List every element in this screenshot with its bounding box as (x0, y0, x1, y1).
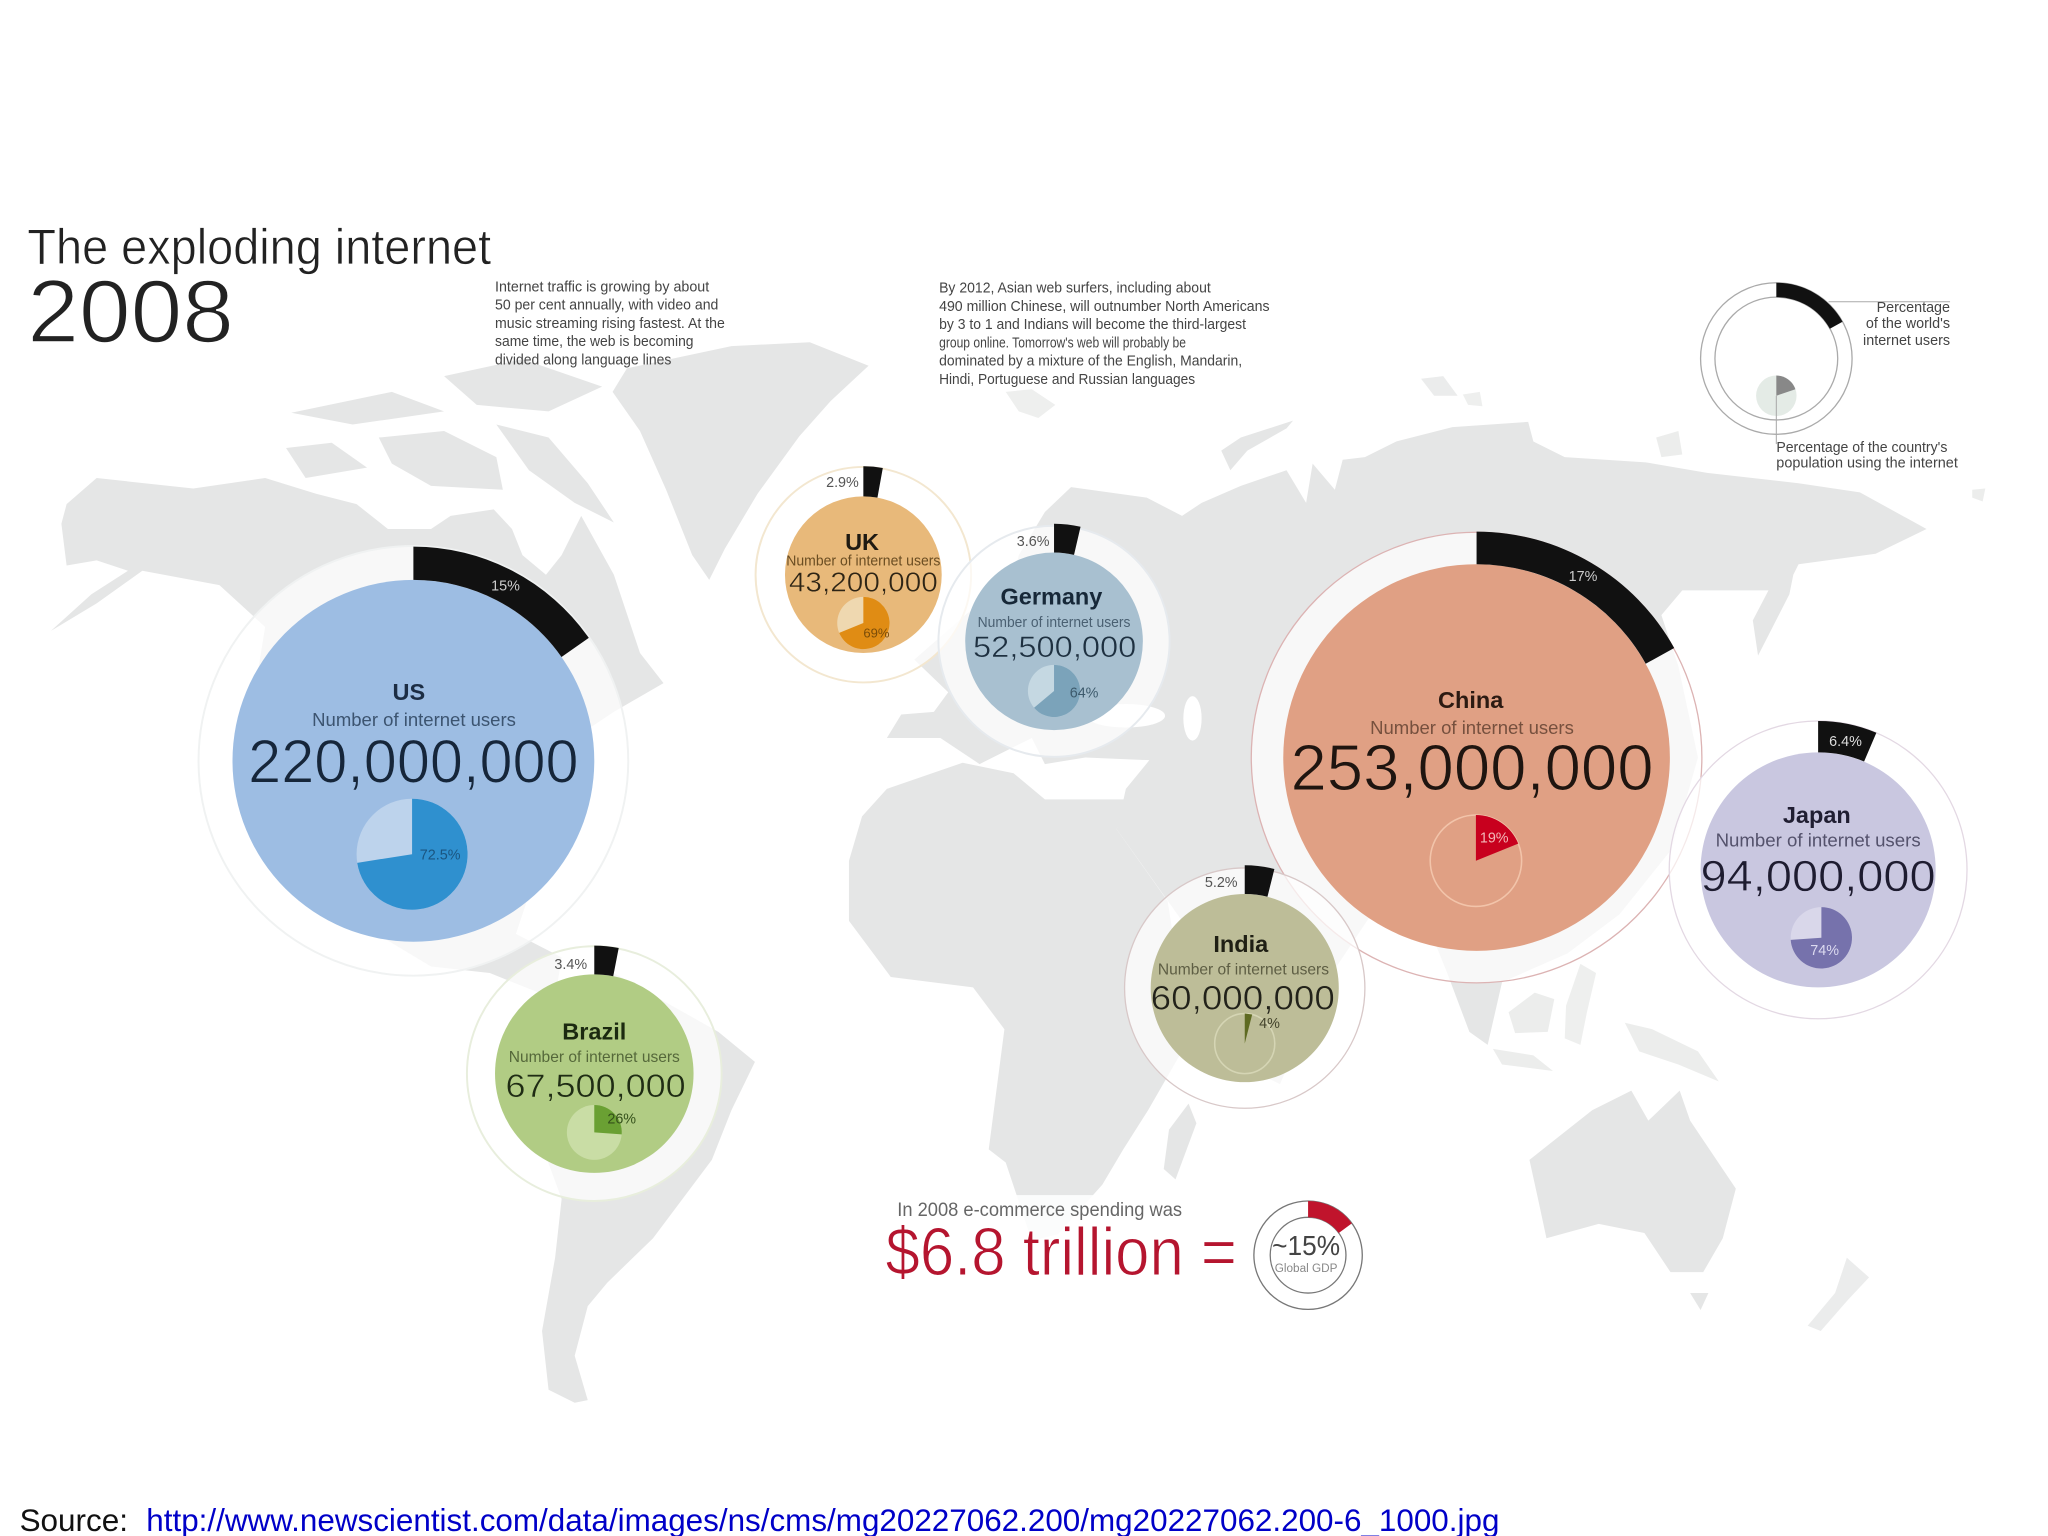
new guinea (1625, 1023, 1719, 1081)
user count: 67,500,000 (505, 1067, 686, 1104)
ring (467, 946, 722, 1201)
legend world share arc (1776, 283, 1843, 329)
world share label: 15% (491, 578, 520, 594)
panel: Germany (938, 524, 1170, 757)
legend label: population share: population using the internet (1776, 456, 1958, 472)
pie (837, 597, 890, 649)
text block: asian web surfers: by 3 to 1 and Indians will become the third-largest (939, 317, 1246, 333)
panel: Brazil (467, 946, 722, 1201)
greenland (613, 342, 869, 580)
text block: asian web surfers (939, 281, 1270, 388)
country name: India (1213, 931, 1269, 957)
user count: 43,200,000 (789, 567, 938, 598)
text block: asian web surfers: dominated by a mixture of the English, Mandarin, (939, 354, 1242, 370)
bubble (965, 552, 1143, 730)
world share arc (1818, 721, 1876, 761)
title: The exploding internet (27, 219, 491, 275)
legend label: world share: internet users (1863, 333, 1950, 349)
text block: asian web surfers: Hindi, Portuguese and Russian languages (939, 372, 1195, 388)
title: 2008 (27, 262, 234, 361)
country name: UK (845, 529, 879, 555)
bubble (1283, 564, 1670, 951)
panel: UK (756, 466, 971, 682)
pie label: 4% (1259, 1016, 1280, 1032)
bubble (232, 580, 594, 942)
sublabel: Number of internet users (1158, 961, 1329, 978)
country name: Brazil (562, 1019, 626, 1045)
pie (1430, 815, 1522, 906)
sublabel: Number of internet users (312, 709, 516, 730)
sulawesi and philippines (1565, 964, 1596, 1045)
legend leader lines (1776, 302, 1950, 444)
pie label: 64% (1070, 685, 1099, 701)
country name: Germany (1000, 584, 1102, 610)
world share label: 5.2% (1205, 875, 1238, 891)
legend label: population share: Percentage of the country's (1776, 440, 1947, 456)
callout figure: $6.8 trillion = (886, 1215, 1237, 1290)
country name: China (1438, 687, 1504, 713)
ring (938, 526, 1170, 757)
panel: Japan (1669, 721, 1967, 1019)
country name: US (392, 679, 425, 705)
bubble (495, 974, 694, 1173)
user count: 220,000,000 (248, 727, 579, 796)
eastern island (1972, 488, 1985, 502)
pie (357, 799, 468, 910)
world share arc (1054, 524, 1081, 555)
backdrop (883, 1195, 1242, 1293)
world share label: 17% (1569, 569, 1598, 585)
panel: US (199, 546, 628, 976)
borneo (1509, 993, 1554, 1033)
bubble (1701, 752, 1936, 987)
australia (1529, 1091, 1736, 1272)
user count: 253,000,000 (1290, 731, 1654, 804)
gdp ring chart: Global GDP (1275, 1262, 1338, 1275)
novaya zemlya (1221, 421, 1293, 470)
central arctic islands (379, 431, 503, 490)
pie label: 72.5% (420, 847, 461, 863)
sublabel: Number of internet users (978, 615, 1130, 631)
text block: asian web surfers: By 2012, Asian web surfers, including about (939, 281, 1211, 297)
black sea (1087, 704, 1165, 728)
ring (756, 467, 971, 682)
world share label: 2.9% (826, 475, 859, 491)
pie label: 26% (607, 1111, 636, 1127)
legend label: world share: of the world's (1866, 316, 1950, 332)
callout: e-commerce (883, 1195, 1362, 1309)
ring (1251, 532, 1702, 983)
franz josef land (1463, 392, 1482, 406)
legend label: world share: Percentage (1877, 300, 1950, 316)
world map (51, 342, 1985, 1403)
world share arc (1245, 865, 1274, 897)
eurasia (887, 422, 1927, 1084)
world share label: 3.4% (554, 957, 587, 973)
ring (199, 546, 628, 976)
world share arc (863, 466, 883, 498)
svalbard (1006, 389, 1055, 418)
title (27, 219, 491, 361)
banks and victoria islands (286, 443, 367, 478)
ring (1125, 868, 1365, 1108)
bubble (1151, 894, 1339, 1082)
sublabel: Number of internet users (1370, 717, 1574, 738)
user count: 60,000,000 (1151, 980, 1335, 1018)
pie label: 19% (1480, 830, 1509, 846)
legend pie (1756, 376, 1797, 416)
legend (1701, 283, 1958, 472)
pie label: 69% (863, 625, 890, 640)
legend label: population share (1776, 440, 1958, 472)
madagascar (1164, 1104, 1196, 1179)
text block: traffic growth: divided along language lines (495, 352, 671, 368)
new zealand (1808, 1258, 1869, 1331)
ring (1669, 721, 1967, 1019)
panel: India (1125, 865, 1365, 1108)
africa (849, 763, 1208, 1241)
legend label: world share (1863, 300, 1950, 349)
country name: Japan (1783, 802, 1851, 828)
text block: traffic growth: music streaming rising fastest. At the (495, 316, 725, 332)
world share arc (1477, 532, 1674, 664)
arctic islands (1421, 376, 1458, 396)
gdp ring chart: ~15% (1272, 1230, 1340, 1261)
baffin island (496, 424, 614, 522)
callout text: In 2008 e-commerce spending was (897, 1199, 1182, 1221)
north america (51, 478, 664, 999)
pie (567, 1105, 622, 1160)
south america (516, 973, 755, 1403)
text block: traffic growth: Internet traffic is growing by about (495, 279, 709, 295)
user count: 52,500,000 (973, 631, 1136, 664)
sublabel: Number of internet users (509, 1049, 680, 1066)
bubble (785, 496, 942, 653)
tasmania (1690, 1293, 1708, 1310)
caspian sea (1183, 696, 1202, 741)
text block: traffic growth: same time, the web is becoming (495, 334, 694, 350)
ellesmere island (444, 359, 602, 411)
gdp ring chart (1254, 1201, 1362, 1309)
legend rings (1701, 283, 1852, 434)
text block: asian web surfers: group online. Tomorrow's web will probably be (939, 335, 1186, 351)
sublabel: Number of internet users (1716, 829, 1921, 850)
text block: asian web surfers: 490 million Chinese, will outnumber North Americans (939, 299, 1270, 315)
pie label: 74% (1810, 943, 1839, 959)
pie (1791, 907, 1852, 968)
text block: traffic growth: 50 per cent annually, with video and (495, 298, 718, 314)
world share label: 3.6% (1017, 534, 1050, 550)
panel: China (1251, 532, 1702, 983)
user count: 94,000,000 (1701, 853, 1936, 901)
java (1493, 1049, 1553, 1071)
pie (1028, 665, 1080, 717)
world share arc (594, 946, 619, 976)
text block: traffic growth (495, 279, 725, 368)
sublabel: Number of internet users (786, 554, 940, 570)
new siberian islands (1656, 431, 1682, 457)
queen elizabeth islands (291, 392, 444, 424)
world share arc (413, 547, 589, 657)
world share label: 6.4% (1829, 734, 1862, 750)
pie (1215, 1014, 1275, 1074)
